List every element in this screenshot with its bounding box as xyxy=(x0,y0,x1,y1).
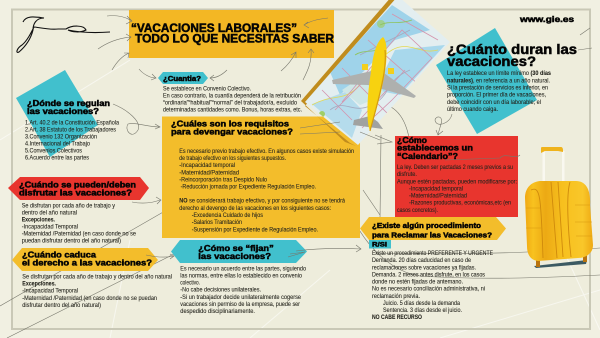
panel: como se fijan: despedido disciplinariamente. xyxy=(180,308,255,315)
panel: calendario: -Incapacidad temporal xyxy=(409,186,463,192)
panel: como se fijan: las vacaciones? xyxy=(198,251,271,261)
panel: requisitos xyxy=(162,116,360,238)
panel: procedimiento: Demanda. 2 meses antes disfrute, en los casos xyxy=(372,272,485,279)
panel: cuanto duran: Si la prestación de servicios es inferior, en xyxy=(447,84,548,91)
panel: donde se regulan: las vacaciones? xyxy=(27,107,99,116)
panel: calendario: -Maternidad/Paternidad xyxy=(409,193,467,200)
panel: procedimiento: Existe un procedimiento PREFERENTE Y URGENTE xyxy=(372,250,493,257)
panel: procedimiento: ¿Existe algún procedimiento xyxy=(372,221,481,230)
panel: requisitos: -Suspensión por Expediente de Regulación Empleo. xyxy=(192,226,318,233)
panel: como se fijan: vacaciones sin permiso de la empresa, puede ser xyxy=(180,301,300,308)
panel: cuando disfrutar xyxy=(8,177,149,245)
panel: donde se regulan: 5.Convenios Colectivos xyxy=(25,148,82,155)
panel: cuando caduca: Excepciones. xyxy=(22,281,56,288)
panel: cuantia: Se establece en Convenio Colectivo. xyxy=(163,85,251,92)
panel: cuantia: “ordinaria”“habitual”“normal” del trabajador/a, excluido xyxy=(163,99,298,106)
panel: cuando disfrutar: disfrutar las vacaciones? xyxy=(19,188,132,198)
panel: calendario: “Calendario”? xyxy=(397,151,458,161)
map xyxy=(301,0,450,146)
panel: donde se regulan: 4.Internacional del Trabajo xyxy=(25,140,90,148)
long thin guide lines xyxy=(0,107,600,338)
panel: procedimiento: Juicio. 5 días desde la demanda xyxy=(383,300,460,307)
panel: donde se regulan: 1.Art. 40.2 de la Constitución Española xyxy=(25,119,119,126)
panel: como se fijan: Es necesario un acuerdo entre las partes, siguiendo xyxy=(180,265,306,272)
panel: requisitos: para devengar vacaciones? xyxy=(171,127,293,137)
panel: cuando disfrutar: ¿Cuándo se pueden/deben xyxy=(19,179,136,189)
panel: calendario: Aunque estén pactadas, pueden modificarse por: xyxy=(397,178,517,185)
panel: cuando caduca: el derecho a las vacaciones? xyxy=(22,258,152,268)
panel: cuanto duran xyxy=(436,28,577,134)
panel: cuanto duran: naturales), en referencia a un año natural. xyxy=(447,77,550,84)
panel: cuanto duran: proporción. El primer día de vacaciones, xyxy=(447,92,546,99)
icon: suitcase xyxy=(525,147,593,268)
panel: como se fijan: las normas, entre ellas lo establecido en convenio xyxy=(180,272,302,279)
panel: cuando caduca: -Incapacidad Temporal xyxy=(22,288,78,295)
panel: requisitos: -Maternidad/Paternidad xyxy=(179,169,240,176)
panel: requisitos: derecho al devengo de las vacaciones en los siguientes casos: xyxy=(179,205,331,212)
panel: requisitos: -Incapacidad temporal xyxy=(179,162,235,169)
panel: calendario: La ley. Deben ser pactadas 2 meses previos a su xyxy=(397,164,513,171)
panel: donde se regulan: 6.Acuerdo entre las partes xyxy=(25,155,89,162)
panel: procedimiento: No es necesario conciliación administrativa, ni xyxy=(372,286,485,293)
panel: procedimiento: NO CABE RECURSO xyxy=(372,314,422,321)
panel: cuando caduca: ¿Cuándo caduca xyxy=(22,249,96,259)
panel: como se fijan: ¿Cómo se “fijan” xyxy=(198,243,274,253)
signature logo xyxy=(17,17,110,52)
panel: cuando caduca xyxy=(12,248,172,309)
panel: cuando disfrutar: -Maternidad /Paternidad (en caso donde no se xyxy=(22,231,136,238)
panel: cuando disfrutar: Se disfrutan por cada año de trabajo y xyxy=(22,202,116,209)
panel: cuanto duran: vacaciones? xyxy=(447,54,536,69)
panel: cuando disfrutar: puedan disfrutar dentro del año natural) xyxy=(22,238,121,245)
panel: cuantia: En caso contrario, la cuantía dependerá de la retribución xyxy=(163,92,301,99)
panel: requisitos: ¿Cuáles son los requisitos xyxy=(171,119,289,129)
panel: procedimiento: reclamaciones sobre vacaciones ya fijadas. xyxy=(372,264,476,271)
panel: cuantia: determinadas cantidades como. Bonus, horas extras, etc. xyxy=(163,107,302,114)
panel: requisitos: Es necesario previo trabajo efectivo. En algunos casos existe simulación xyxy=(179,148,354,155)
panel: cuando caduca: -Maternidad /Paternidad (en caso donde no se puedan xyxy=(22,295,157,302)
panel: requisitos: -Reincorporación tras Despido Nulo xyxy=(179,176,267,184)
panel: cuando caduca: disfrutar dentro del año natural) xyxy=(22,302,101,309)
panel: cuanto duran: ¿Cuánto duran las xyxy=(447,42,577,57)
panel: donde se regulan: 3.Convenio 132 Organización xyxy=(25,134,97,140)
panel: donde se regulan: ¿Dónde se regulan xyxy=(27,99,110,108)
panel: como se fijan xyxy=(171,240,307,315)
panel: procedimiento: para Reclamar las Vacaciones? xyxy=(372,230,492,239)
icon: airplane xyxy=(332,37,416,131)
website url: www.gie.es xyxy=(519,15,575,24)
panel: requisitos: -Reducción jornada por Expediente Regulación Empleo. xyxy=(181,184,316,191)
panel: calendario: establecemos un xyxy=(397,143,473,153)
panel: calendario: -Razones productivas, económicas,etc (en xyxy=(409,200,511,207)
panel: procedimiento: reclamación previa. xyxy=(372,293,420,300)
hand-drawn arrows xyxy=(98,16,592,259)
title banner: “VACACIONES LABORALES” xyxy=(131,23,297,35)
panel: cuando disfrutar: -Incapacidad Temporal xyxy=(22,224,78,231)
panel: procedimiento: R/SI xyxy=(372,242,387,249)
panel: requisitos: -Salarios Tramitación xyxy=(192,219,242,226)
panel: calendario xyxy=(395,135,518,217)
panel: procedimiento: Demanda. 20 días caducidad en caso de xyxy=(372,257,471,264)
panel: cuanto duran: último cuando caiga. xyxy=(447,106,498,113)
panel: como se fijan: -No cabe decisiones unilaterales. xyxy=(180,287,261,294)
panel: calendario: ¿Cómo xyxy=(397,135,427,145)
title banner: TODO LO QUE NECESITAS SABER xyxy=(135,34,335,46)
panel: requisitos: -Excedencia Cuidado de hijos xyxy=(192,212,263,219)
panel: calendario: disfrute. xyxy=(397,171,417,178)
panel: procedimiento: Sentencia. 3 días desde el juicio. xyxy=(383,307,462,314)
panel: requisitos: de trabajo efectivo en los siguientes supuestos. xyxy=(179,155,286,162)
panel: donde se regulan: 2.Art. 38 Estatuto de los Trabajadores xyxy=(25,126,116,133)
panel: cuanto duran: debe coincidir con un día laborable; el xyxy=(447,99,541,106)
title banner xyxy=(129,10,335,58)
panel: cuanto duran: La ley establece un límite mínimo (30 días xyxy=(447,70,551,77)
panel: cuantia: ¿Cuantia? xyxy=(163,76,201,83)
panel: cuantia xyxy=(158,72,302,114)
panel: requisitos: NO se considerará trabajo efectivo, y por consiguiente no se tendrá xyxy=(179,198,345,205)
panel: calendario: casos concretos). xyxy=(397,207,438,214)
panel: como se fijan: colectivo. xyxy=(180,280,200,287)
panel: cuando disfrutar: Excepciones. xyxy=(22,217,55,224)
panel: cuando disfrutar: dentro del año natural xyxy=(22,209,77,216)
panel: donde se regulan xyxy=(16,70,119,162)
panel: cuando caduca: Se disfrutan por cada año de trabajo y dentro del año natural xyxy=(22,274,172,281)
panel: como se fijan: -Si un trabajador decide unilateralmente cogerse xyxy=(180,294,301,301)
panel: procedimiento xyxy=(360,217,506,321)
panel: procedimiento: donde no estén fijadas de antemano. xyxy=(372,279,463,286)
